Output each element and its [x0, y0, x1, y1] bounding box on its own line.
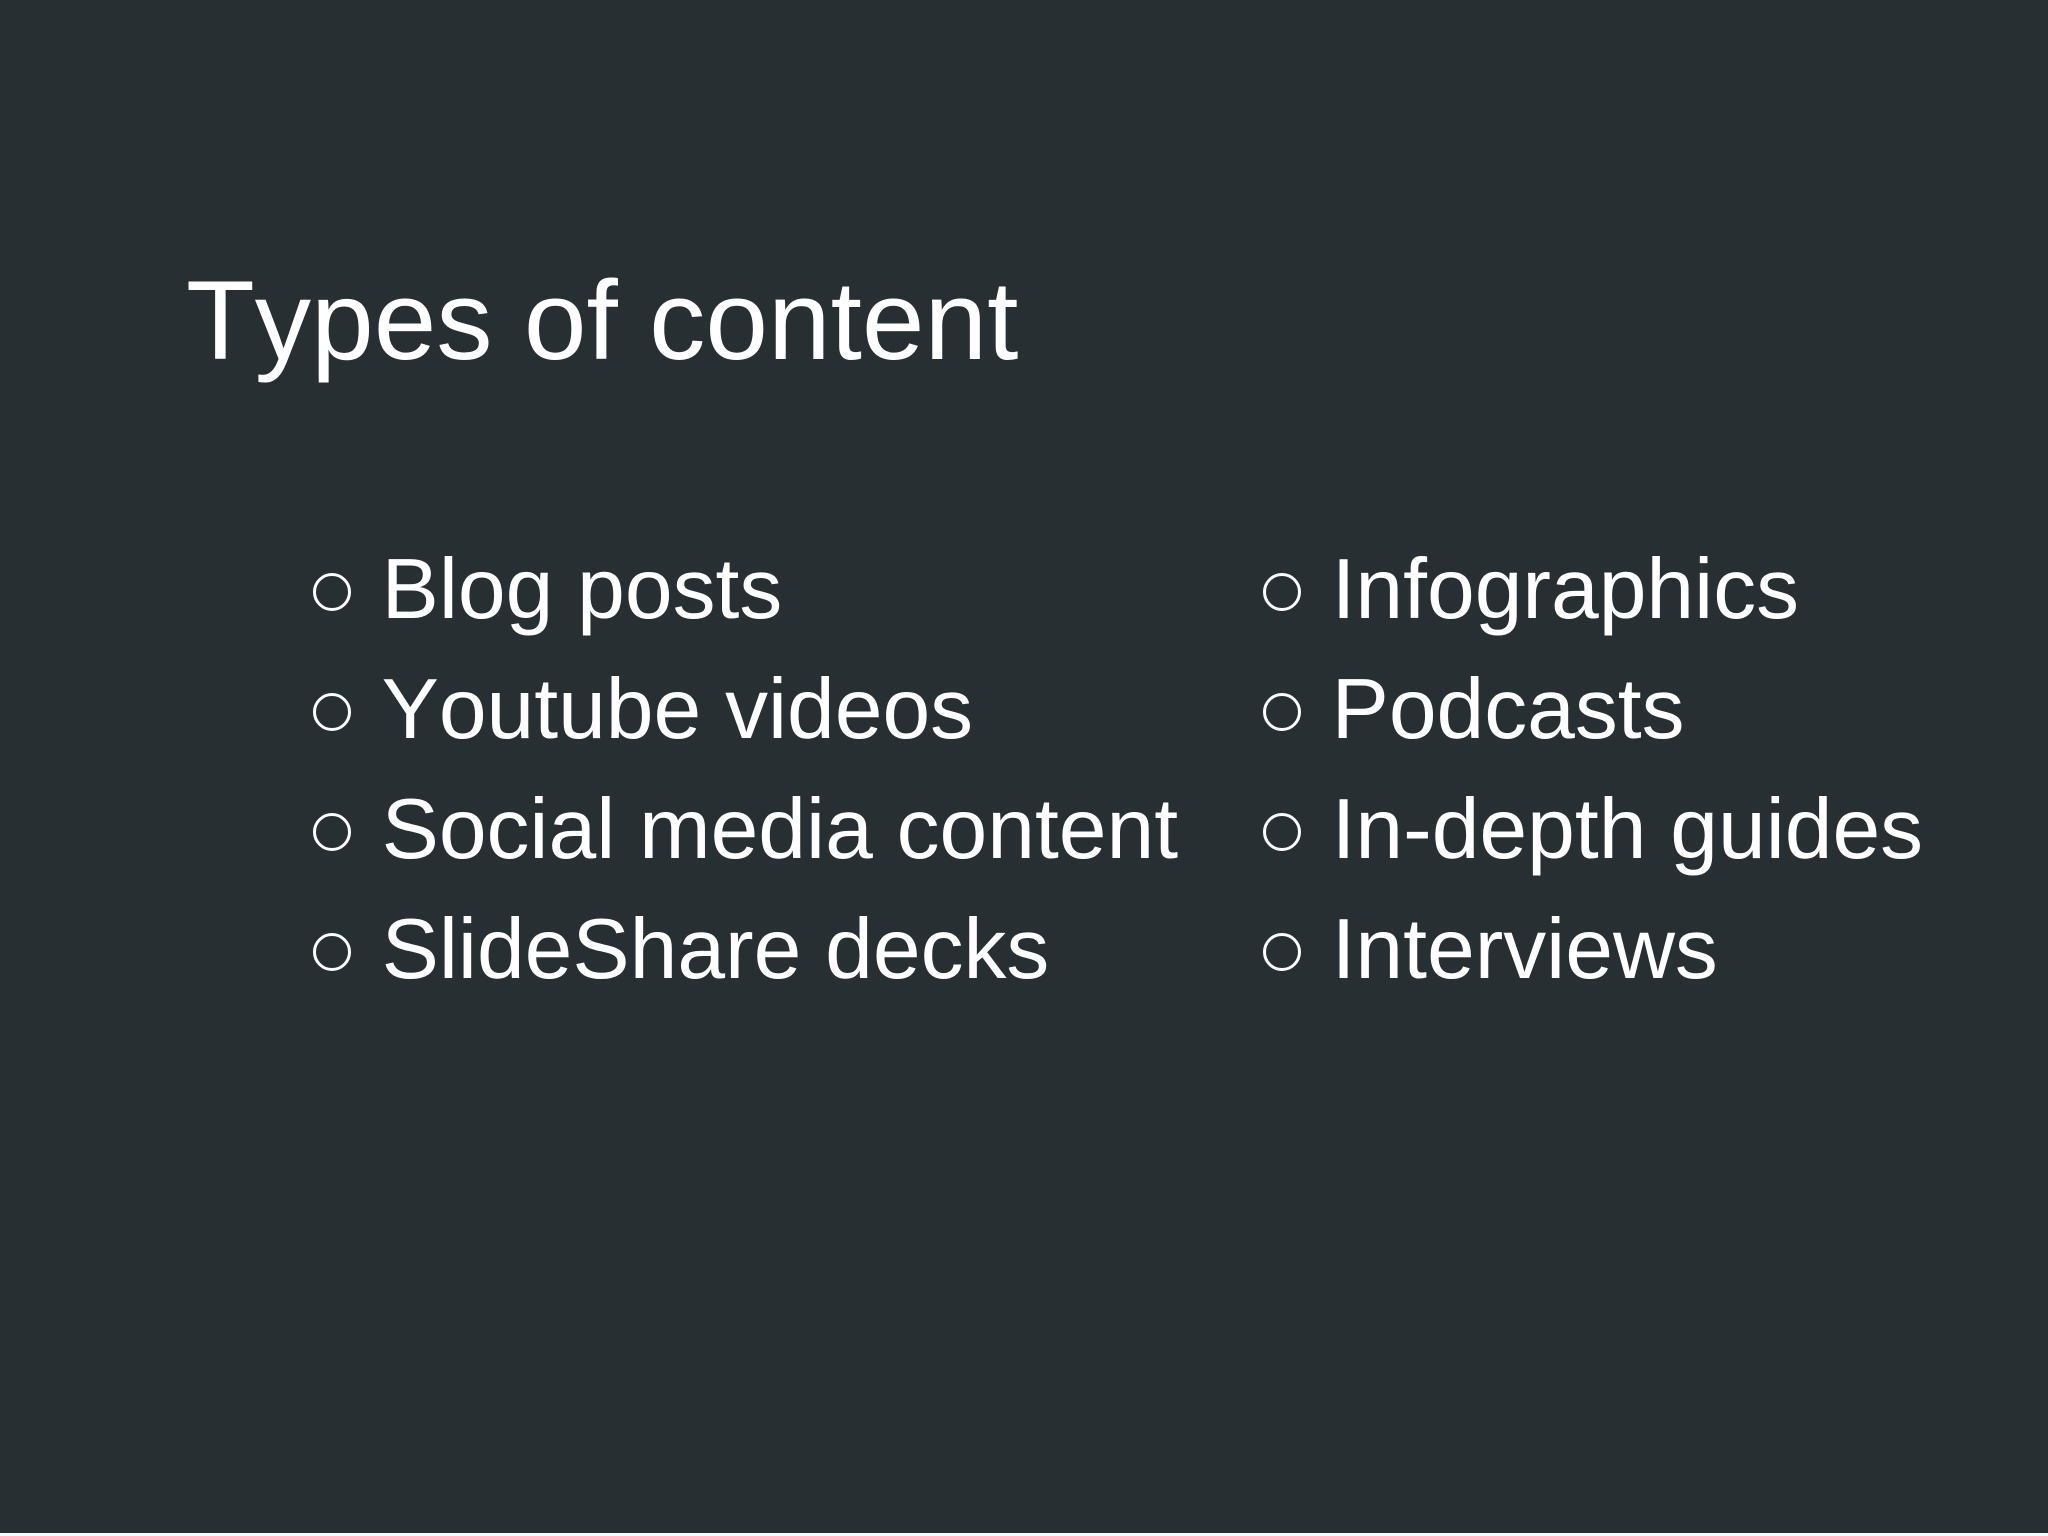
- list item: Podcasts: Podcasts: [1332, 661, 1685, 757]
- list item: Interviews: Interviews: [1332, 901, 1718, 997]
- list item: Youtube videos: Youtube videos: [382, 661, 973, 757]
- list item: Infographics: Infographics: [1332, 541, 1799, 637]
- list item: SlideShare decks: SlideShare decks: [382, 901, 1049, 997]
- list: left column: [313, 541, 1178, 997]
- list: right column: [1263, 541, 1923, 997]
- list item: In-depth guides: In-depth guides: [1332, 781, 1923, 877]
- title: Types of content: [186, 257, 1018, 383]
- list item: Blog posts: Blog posts: [382, 541, 782, 637]
- list item: Social media content: Social media content: [382, 781, 1178, 877]
